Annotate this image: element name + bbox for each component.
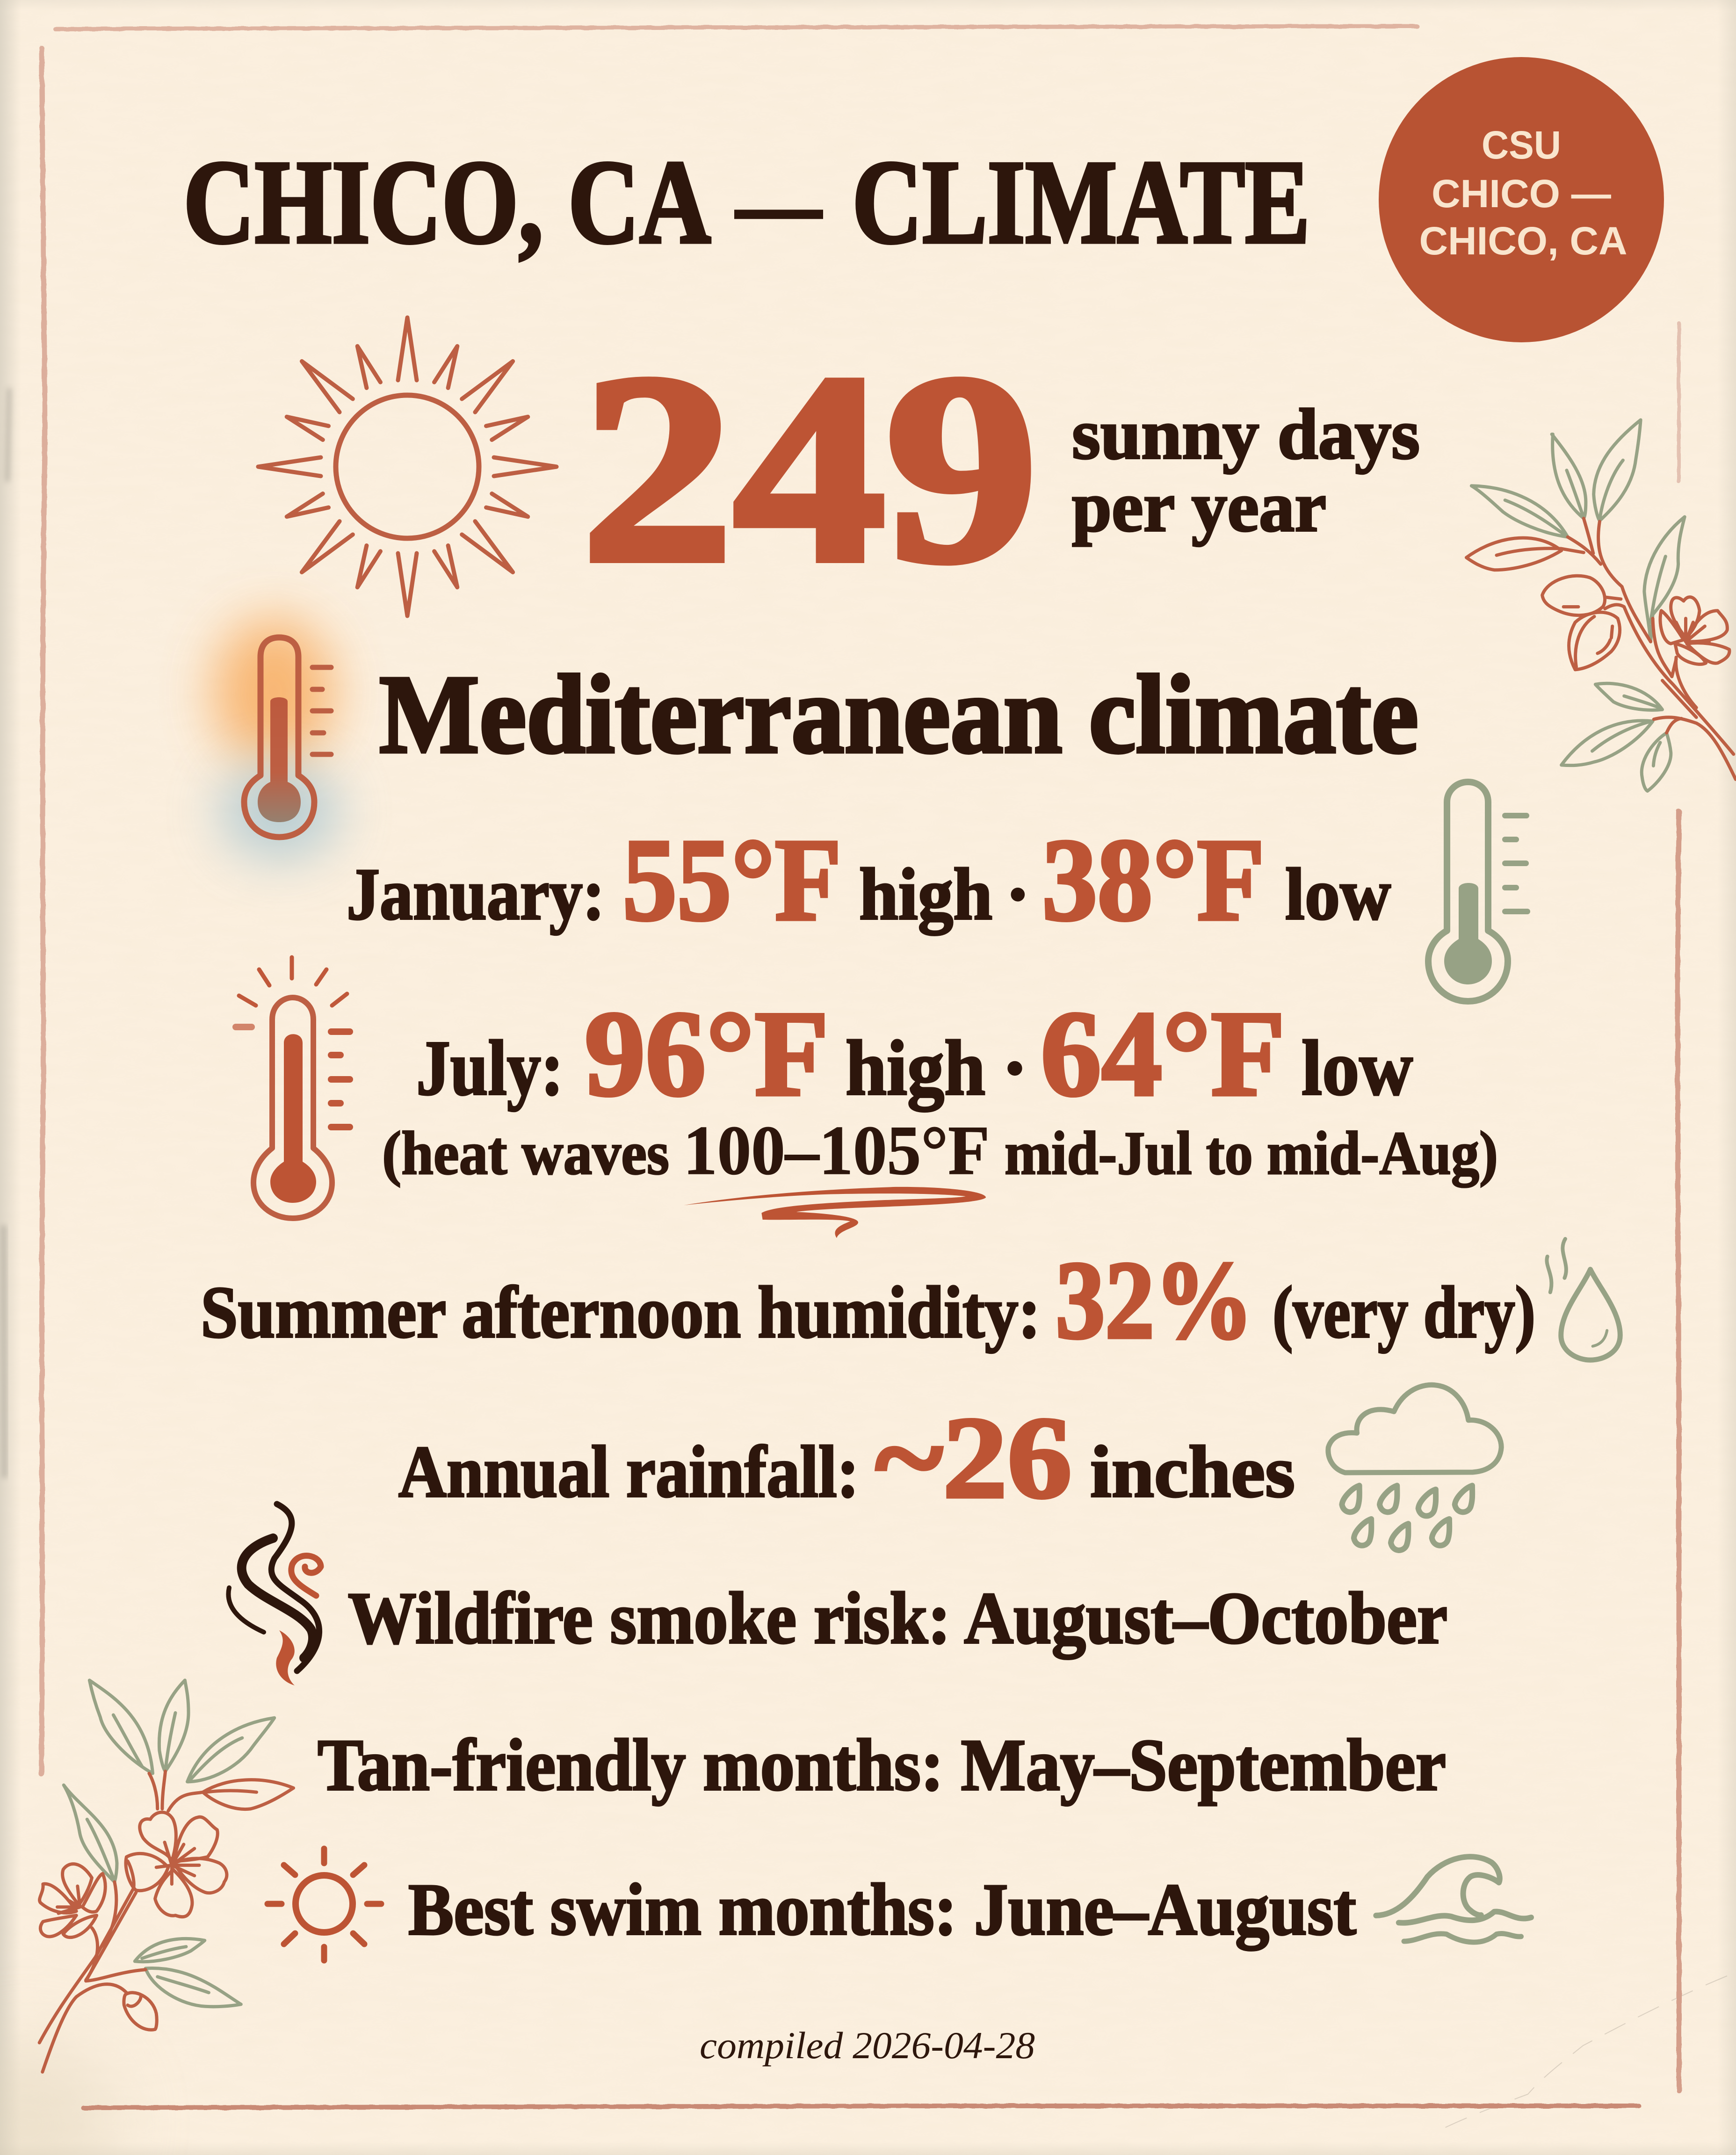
wildfire smoke line: Wildfire smoke risk: August–October xyxy=(348,1577,1447,1659)
title: CLIMATE xyxy=(852,136,1310,268)
heat wave note: mid-Jul to mid-Aug) xyxy=(1005,1119,1498,1187)
sunny days label xyxy=(1072,395,1420,547)
swim months line: Best swim months: June–August xyxy=(408,1869,1356,1951)
red stem, nuts and flower xyxy=(1466,518,1736,780)
tan-friendly line: Tan-friendly months: May–September xyxy=(318,1724,1446,1806)
compiled date: compiled 2026-04-28 xyxy=(700,2024,1035,2067)
heat wave note xyxy=(382,1112,1498,1189)
title: — xyxy=(735,136,823,268)
badge: CSU Chico xyxy=(1379,57,1664,342)
July temperatures: high xyxy=(846,1025,985,1112)
title xyxy=(183,136,1310,268)
July temperatures: 64°F xyxy=(1041,986,1285,1121)
botanical: blossom branch bottom left xyxy=(39,1680,294,2072)
July temperatures: · xyxy=(1002,1025,1028,1112)
icon: water drop with vapor xyxy=(1547,1239,1620,1360)
icon: sun xyxy=(258,318,557,616)
icon: rain cloud xyxy=(1328,1385,1501,1550)
July temperatures: 96°F xyxy=(585,986,829,1121)
January temperatures: high xyxy=(859,853,992,935)
botanical: almond branch top right xyxy=(1466,420,1736,791)
January temperatures: low xyxy=(1285,853,1391,935)
icon: thermometer with warm and cool glow xyxy=(213,617,340,861)
July temperatures xyxy=(416,986,1413,1121)
January temperatures: 38°F xyxy=(1042,814,1265,945)
heading: Mediterranean climate: Mediterranean climate xyxy=(379,652,1418,776)
January temperatures: · xyxy=(1005,853,1030,935)
icon: wildfire smoke xyxy=(228,1504,321,1685)
rainfall line xyxy=(398,1393,1295,1523)
rainfall line: ~26 xyxy=(875,1393,1072,1523)
green leaves xyxy=(1471,420,1685,791)
green leaves xyxy=(64,1680,275,2007)
rainfall line: Annual rainfall: xyxy=(398,1431,859,1513)
sunny days label: per year xyxy=(1072,467,1326,547)
January temperatures xyxy=(347,814,1391,945)
badge: CSU Chico: CHICO — xyxy=(1432,172,1611,216)
icon: wave xyxy=(1376,1857,1531,1942)
badge: CSU Chico: CSU xyxy=(1482,123,1561,167)
icon: hot thermometer xyxy=(236,957,350,1218)
humidity line: 32% xyxy=(1056,1239,1253,1362)
big number: 249: 249 xyxy=(581,319,1038,618)
humidity line xyxy=(201,1239,1535,1362)
title: CHICO, CA xyxy=(183,136,711,268)
July temperatures: July: xyxy=(416,1025,564,1112)
heat wave note: 100–105°F xyxy=(683,1112,990,1189)
rainfall line: inches xyxy=(1090,1431,1295,1513)
badge: CSU Chico: CHICO, CA xyxy=(1419,219,1628,263)
icon: small sun xyxy=(268,1849,381,1960)
heat wave note: (heat waves xyxy=(382,1119,669,1187)
humidity line: (very dry) xyxy=(1273,1272,1535,1353)
January temperatures: January: xyxy=(347,853,605,935)
humidity line: Summer afternoon humidity: xyxy=(201,1272,1041,1353)
January temperatures: 55°F xyxy=(622,814,841,945)
hand-drawn underline xyxy=(684,1187,986,1238)
icon: cool thermometer xyxy=(1428,782,1527,1001)
July temperatures: low xyxy=(1302,1025,1413,1112)
sunny days label: sunny days xyxy=(1072,395,1420,474)
red stems, buds and flowers xyxy=(39,1772,294,2072)
